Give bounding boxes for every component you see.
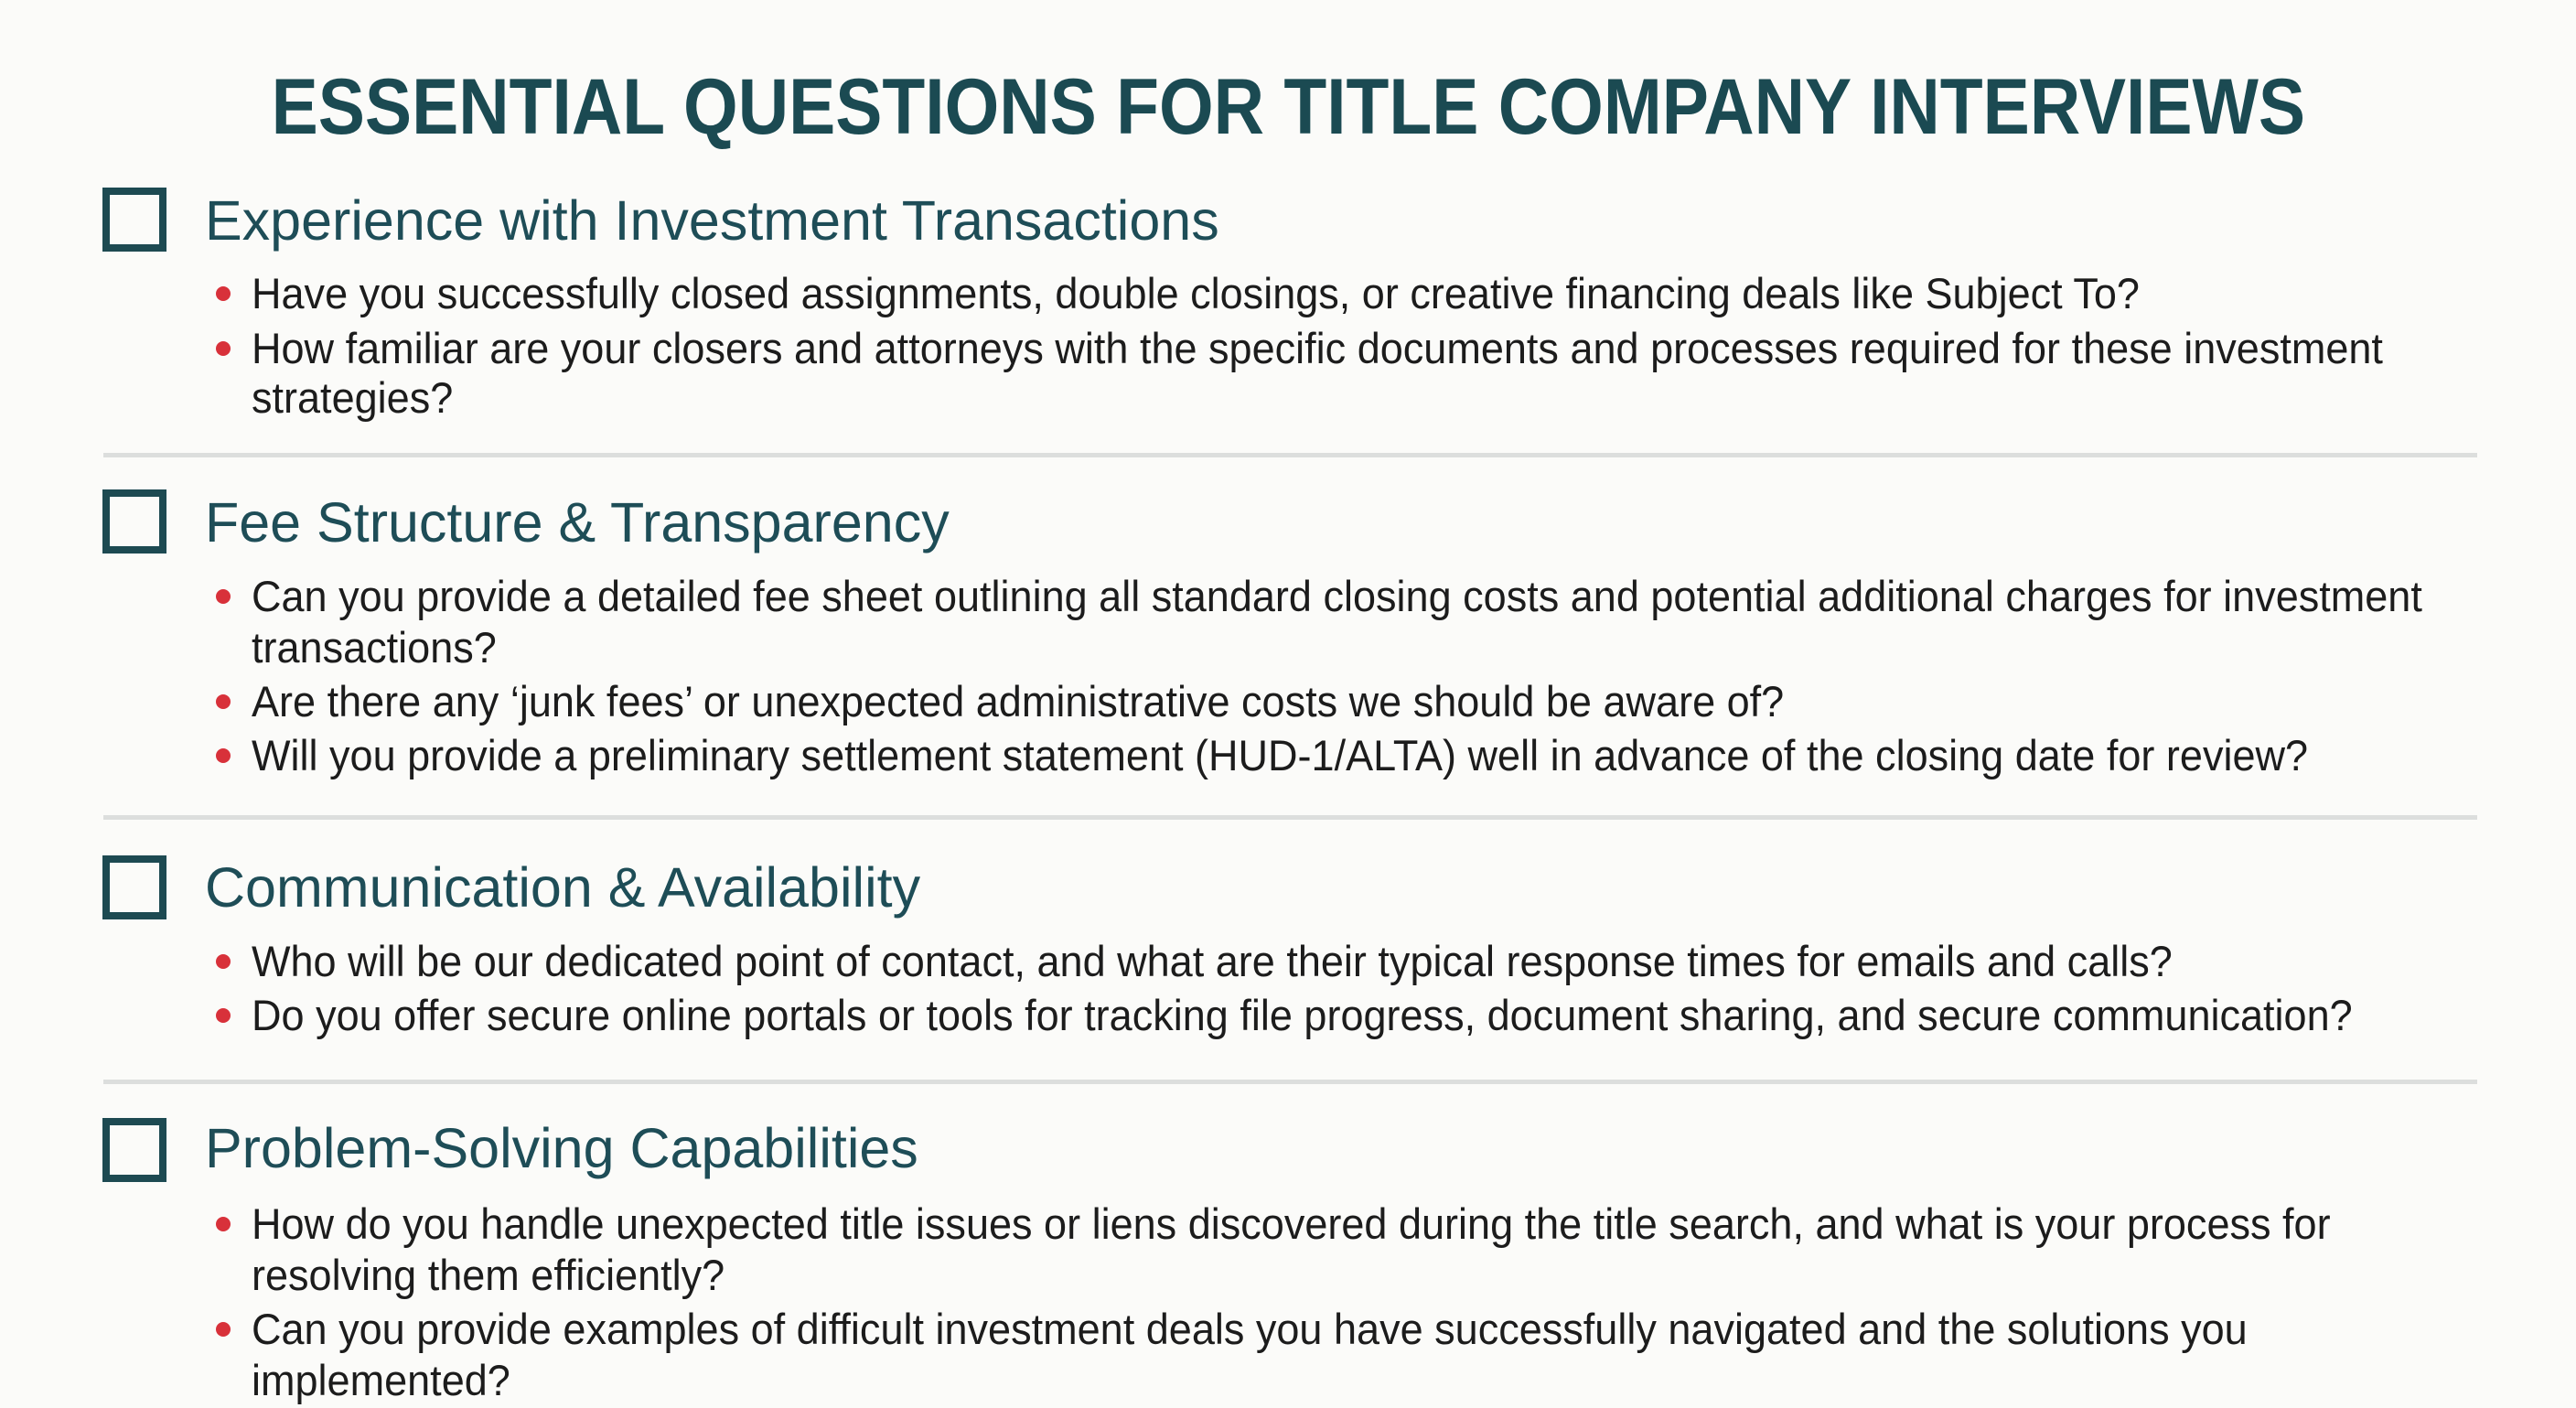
section: problem solving: implemented? — [252, 1356, 510, 1404]
section: experience: Have you successfully closed assignments, double closings, or creative financing deals like Subject To? — [252, 269, 2140, 317]
heading: Problem-Solving Capabilities — [205, 1117, 918, 1179]
heading: Experience with Investment Transactions — [205, 189, 1219, 252]
section: problem solving: resolving them efficiently? — [252, 1251, 724, 1299]
section: problem solving: How do you handle unexpected title issues or liens discovered during the title search, and what is your process for — [252, 1199, 2331, 1248]
heading: Communication & Availability — [205, 856, 920, 919]
bullet 2 — [216, 694, 231, 709]
checkbox — [102, 1118, 166, 1182]
section: communication: Who will be our dedicated point of contact, and what are their typical response times for emails and calls? — [252, 937, 2173, 985]
bullet 1 — [216, 286, 231, 301]
section: fees: Are there any ‘junk fees’ or unexpected administrative costs we should be aware of? — [252, 677, 1784, 725]
section: experience: strategies? — [252, 373, 453, 422]
section: communication: Do you offer secure online portals or tools for tracking file progress, document sharing, and secure communication? — [252, 991, 2353, 1039]
checkbox — [102, 855, 166, 919]
section: experience: How familiar are your closers and attorneys with the specific documents and processes required for these investment — [252, 324, 2383, 372]
bullet 2 — [216, 341, 231, 356]
bullet 1 — [216, 954, 231, 969]
checkbox — [102, 489, 166, 554]
checkbox — [102, 188, 166, 252]
section: problem solving — [102, 1117, 2331, 1404]
section: communication — [102, 855, 2353, 1039]
section: fees: Can you provide a detailed fee sheet outlining all standard closing costs and potential additional charges for investment — [252, 572, 2422, 620]
bullet 2 — [216, 1322, 231, 1337]
heading: Fee Structure & Transparency — [205, 491, 950, 554]
bullet 2 — [216, 1008, 231, 1023]
section: experience — [102, 188, 2383, 422]
bullet 1 — [216, 589, 231, 604]
title: ESSENTIAL QUESTIONS FOR TITLE COMPANY INTERVIEWS — [271, 63, 2305, 151]
section: fees: Will you provide a preliminary settlement statement (HUD-1/ALTA) well in advance of the closing date for review? — [252, 731, 2308, 779]
bullet 1 — [216, 1217, 231, 1231]
section: fees: transactions? — [252, 623, 497, 672]
section: fees — [102, 489, 2422, 779]
bullet 3 — [216, 748, 231, 763]
section: problem solving: Can you provide examples of difficult investment deals you have successfully navigated and the solutions you — [252, 1305, 2248, 1353]
